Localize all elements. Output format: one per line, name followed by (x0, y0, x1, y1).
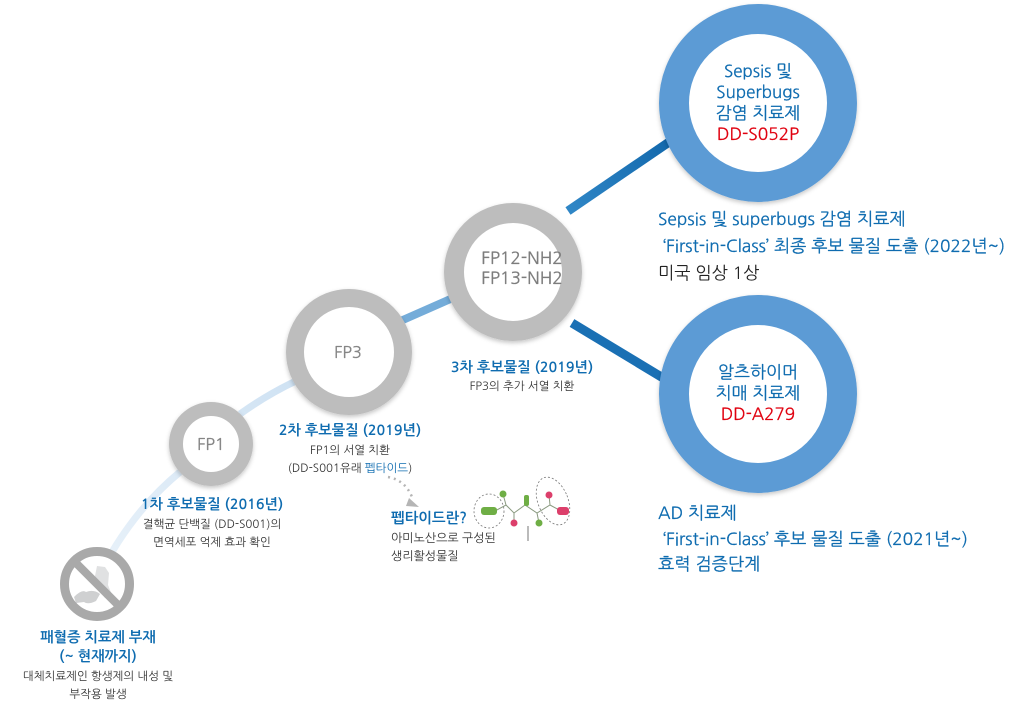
text: third candidate (451, 360, 593, 392)
text inside sepsis circle (716, 62, 800, 143)
text: AD candidate description: ‘First-in-Class’ 후보 물질 도출 (2021년~) (663, 530, 968, 548)
text inside sepsis circle: DD-S052P (717, 126, 799, 143)
text: no therapy: 부작용 발생 (69, 688, 127, 700)
text: third candidate: 3차 후보물질 (2019년) (451, 361, 593, 375)
circle: FP1 (176, 409, 246, 479)
circle: FP12-NH2 FP13-NH2 (454, 213, 572, 331)
text inside Alzheimer circle: 치매 치료제 (716, 385, 800, 402)
peptide molecule diagram (474, 472, 576, 541)
text inside sepsis circle: 감염 치료제 (716, 105, 800, 122)
text: first candidate: 1차 후보물질 (2016년) (141, 498, 283, 512)
text: no therapy: (~ 현재까지) (59, 650, 137, 664)
text: no therapy: 패혈증 치료제 부재 (40, 631, 156, 645)
text: no therapy: 대체치료제인 항생제의 내성 및 (23, 670, 173, 682)
text: third candidate: FP3의 추가 서열 치환 (470, 380, 574, 392)
text: sepsis candidate description (658, 210, 1005, 282)
text inside Alzheimer circle: DD-A279 (721, 406, 795, 423)
text: sepsis candidate description: 미국 임상 1상 (658, 265, 759, 282)
circle: FP12-NH2 FP13-NH2: FP12-NH2 (481, 250, 563, 267)
text: peptide definition: 생리활성물질 (391, 550, 459, 562)
text: first candidate: 면역세포 억제 효과 확인 (153, 536, 271, 548)
icon: prohibited sign (64, 552, 130, 616)
text: second candidate: 2차 후보물질 (2019년) (279, 424, 421, 438)
text: sepsis candidate description: ‘First-in-Class’ 최종 후보 물질 도출 (2022년~) (663, 238, 1005, 255)
text: sepsis candidate description: Sepsis 및 superbugs 감염 치료제 (658, 211, 906, 228)
text: second candidate: (DD-S001유래 펩타이드) (288, 462, 412, 474)
arrow: dotted peptide callout (388, 477, 419, 507)
text inside sepsis circle: Sepsis 및 (724, 63, 792, 80)
text: second candidate: FP1의 서열 치환 (310, 444, 390, 456)
text: AD candidate description (658, 504, 968, 573)
text: peptide definition (391, 510, 496, 562)
text inside sepsis circle: Superbugs (716, 84, 800, 101)
connector: FP12 to DD-A279 (572, 323, 668, 381)
connector: FP3 to FP12 (396, 297, 455, 323)
text: peptide definition: 펩타이드란? (391, 512, 467, 526)
circle: FP12-NH2 FP13-NH2: FP13-NH2 (481, 270, 563, 287)
text: no therapy (23, 630, 173, 700)
connector: FP12 to DD-S052P (568, 138, 675, 211)
circle: FP3: FP3 (334, 345, 362, 361)
connector: absence to FP1 (112, 472, 180, 552)
text: second candidate (279, 423, 421, 474)
text: AD candidate description: 효력 검증단계 (658, 556, 760, 573)
circle: FP1: FP1 (197, 437, 225, 453)
text inside Alzheimer circle: 알츠하이머 (718, 364, 798, 381)
text: peptide definition: 아미노산으로 구성된 (391, 532, 496, 544)
text: AD candidate description: AD 치료제 (658, 505, 737, 522)
circle: FP3 (295, 298, 403, 406)
circle: Alzheimer's therapy (674, 310, 842, 478)
text: first candidate: 결핵균 단백질 (DD-S001)의 (143, 518, 281, 530)
circle: sepsis therapy (674, 19, 842, 187)
text inside Alzheimer circle (716, 364, 800, 423)
connector: FP1 to FP3 (240, 380, 298, 414)
text: first candidate (141, 497, 283, 548)
